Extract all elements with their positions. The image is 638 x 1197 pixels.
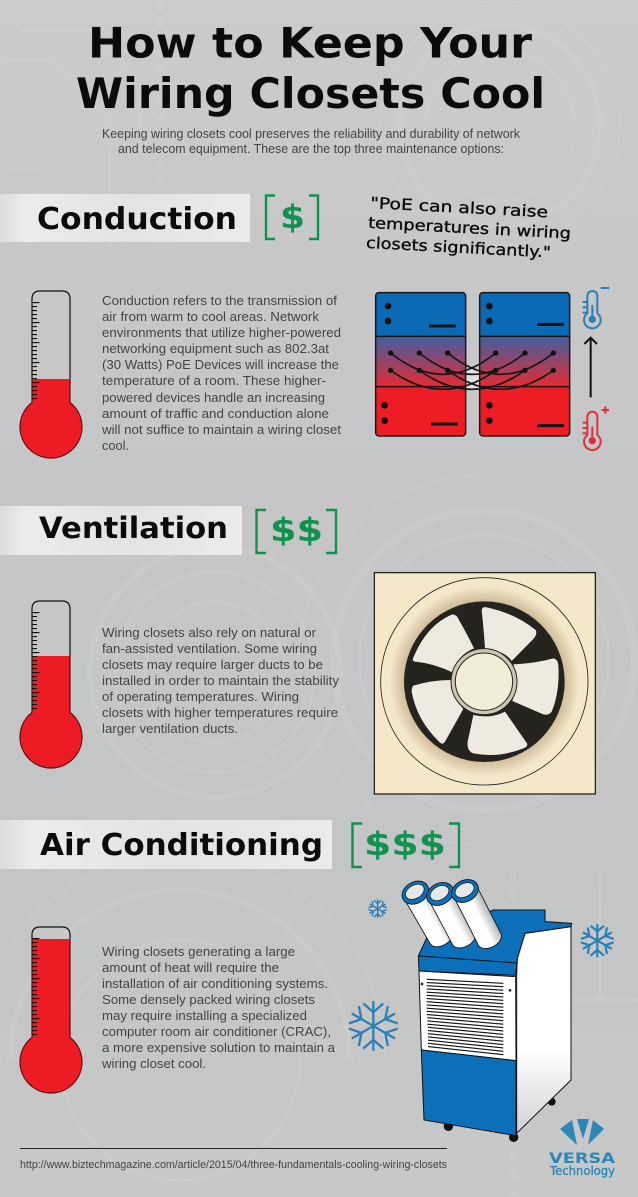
fan blades [412, 607, 559, 755]
text: ventilation: of operating temperatures. Wiring [102, 690, 299, 704]
text: air conditioning: Wiring closets generating a large [102, 945, 295, 959]
text: conduction: will not suffice to maintain a wiring closet [101, 423, 342, 437]
text: air conditioning: Some densely packed wiring closets [102, 993, 315, 1007]
text: conduction: networking equipment such as 802.3at [102, 342, 330, 356]
logo: Versa Technology: Technology [549, 1164, 615, 1178]
heading: Conduction: Conduction [37, 202, 237, 237]
thermometer: conduction [20, 291, 82, 458]
text: air conditioning: may require installing a specialized [102, 1009, 307, 1023]
logo: Versa Technology: VERSA [549, 1151, 615, 1167]
thermometer: ventilation [20, 601, 82, 768]
arrow: heat rises [584, 338, 597, 397]
logo: Versa Technology [549, 1119, 615, 1178]
title [76, 18, 545, 118]
text: ventilation: larger ventilation ducts. [102, 722, 238, 736]
text: air conditioning [101, 945, 335, 1071]
intro text [102, 127, 521, 156]
vent grille [427, 979, 503, 1055]
text: conduction: powered devices handle an increasing [102, 391, 325, 405]
heading: Air Conditioning: Air Conditioning [40, 828, 323, 863]
intro text: Keeping wiring closets cool preserves the reliability and durability of network [102, 127, 521, 141]
heading: Air Conditioning [0, 820, 332, 869]
text: ventilation: installed in order to maintain the stability [102, 674, 340, 688]
snowflake left [347, 1001, 400, 1051]
cost: $: $ [280, 198, 305, 236]
cost: $$ [256, 510, 336, 553]
quote: temperatures in wiring [368, 214, 571, 243]
thermometer: air conditioning [20, 927, 82, 1093]
snowflake right [580, 924, 615, 957]
cost: $$: $$ [270, 511, 323, 549]
text: ventilation: fan-assisted ventilation. Some wiring [102, 642, 317, 656]
heading: Ventilation: Ventilation [39, 511, 228, 545]
wire gap highlight [466, 368, 479, 390]
heading: Conduction [0, 194, 250, 242]
text: conduction: Conduction refers to the transmission of [102, 294, 338, 308]
quote: "PoE can also raise [370, 194, 548, 221]
unit body [418, 910, 572, 1136]
text: conduction: cool. [102, 439, 129, 453]
icon: hot thermometer [583, 406, 609, 450]
title: Wiring Closets Cool [76, 69, 545, 118]
text: conduction: temperature of a room. These higher- [102, 374, 326, 388]
wires [388, 350, 556, 389]
server racks diagram [376, 288, 609, 450]
text: conduction: air from warm to cool areas. Network [102, 310, 320, 324]
cost: $ [266, 196, 318, 239]
cost: $$$: $$$ [364, 825, 446, 863]
text: conduction: amount of traffic and conduction alone [102, 407, 329, 421]
intro text: and telecom equipment. These are the top three maintenance options: [118, 142, 504, 156]
text: air conditioning: amount of heat will require the [102, 961, 279, 975]
source line: http://www.biztechmagazine.com/article/2015/04/three-fundamentals-cooling-wiring-closets [20, 1159, 447, 1171]
text: ventilation: Wiring closets also rely on natural or [102, 626, 316, 640]
wheels [444, 1098, 556, 1142]
air conditioner illustration [347, 875, 615, 1142]
text: conduction [101, 294, 342, 453]
cost: $$$ [352, 824, 459, 867]
text: air conditioning: installation of air conditioning systems. [102, 977, 328, 991]
text: ventilation [102, 626, 340, 736]
quote [366, 194, 572, 263]
exhaust pipes [398, 876, 457, 951]
text: air conditioning: wiring closet cool. [101, 1057, 206, 1071]
snowflake small [368, 899, 388, 918]
quote: closets significantly." [366, 234, 551, 262]
text: air conditioning: computer room air conditioner (CRAC), [102, 1025, 331, 1039]
text: conduction: environments that utilize higher-powered [102, 326, 341, 340]
right rack [480, 293, 570, 436]
fan illustration [374, 573, 595, 794]
title: How to Keep Your [88, 18, 532, 68]
heading: Ventilation [0, 506, 242, 555]
text: conduction: (30 Watts) PoE Devices will increase the [102, 358, 339, 372]
fan hub [451, 649, 517, 715]
left rack [376, 293, 466, 436]
text: ventilation: closets may require larger ducts to be [102, 658, 323, 672]
icon: cool thermometer [583, 288, 609, 328]
text: ventilation: closets with higher temperatures require [102, 706, 338, 720]
text: air conditioning: a more expensive solution to maintain a [102, 1041, 335, 1055]
